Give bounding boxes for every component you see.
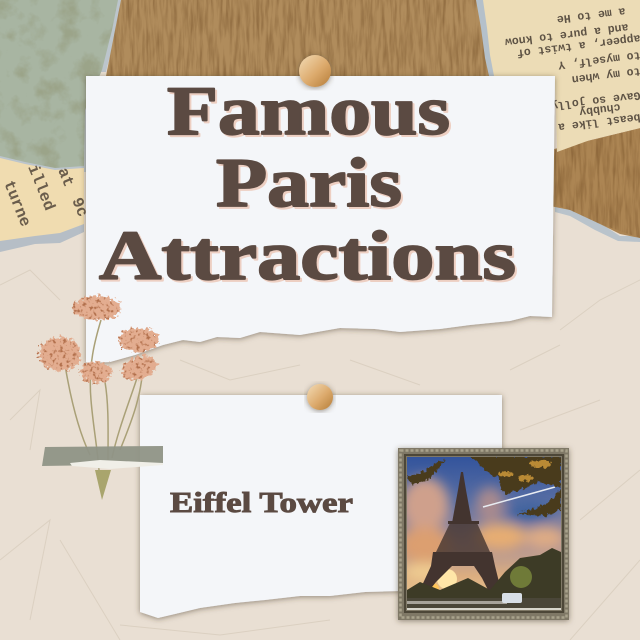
title shadow: Famous: [169, 75, 452, 152]
sun glow: [437, 569, 457, 589]
title text: Attractions: [99, 218, 516, 295]
title shadow: Paris: [218, 147, 404, 224]
newspaper scrap: top right: appeer, a twist of: [516, 31, 640, 59]
clouds: [399, 477, 565, 581]
title text: Famous: [167, 73, 450, 150]
newspaper scrap: top right: beast like a: [557, 110, 640, 133]
torn paper: brown kraft: [100, 0, 500, 80]
branches: [407, 456, 561, 516]
trees: [407, 548, 561, 600]
newspaper scrap: left: [0, 158, 91, 252]
frame: [398, 448, 569, 620]
newspaper scrap: top right: chubby: [578, 100, 621, 118]
newspaper scrap: left: turne: [0, 178, 34, 229]
washi tape: [42, 446, 163, 466]
white torn paper card: title: [86, 76, 555, 363]
newspaper scrap: top right: to my when: [571, 64, 640, 85]
contrail: [483, 487, 555, 507]
card heading: Eiffel Tower: Eiffel Tower: [170, 488, 353, 519]
newspaper scrap: left: 9c: [67, 195, 91, 220]
blossoms: [39, 296, 160, 384]
pin: title card: [299, 55, 331, 87]
title text: [99, 73, 516, 295]
ground: [407, 598, 561, 608]
pin: Eiffel Tower card: [307, 384, 333, 410]
stems: [65, 320, 143, 470]
dried flowers with tape: [39, 296, 163, 500]
torn paper: brown kraft right: [550, 125, 640, 242]
stem ends: [95, 470, 111, 500]
tower: [419, 472, 501, 592]
title shadow: [101, 75, 518, 297]
van: [502, 593, 522, 603]
torn paper: green: [0, 0, 122, 172]
newspaper scrap: top right: to myself, Y: [557, 48, 640, 71]
title: [99, 73, 518, 297]
title text: Paris: [216, 145, 402, 222]
newspaper scrap: top right: a me to He: [556, 4, 626, 25]
newspaper scrap: left: illed: [23, 162, 58, 213]
framed photo: Eiffel Tower: [398, 448, 569, 620]
white torn paper card: Eiffel Tower: [140, 395, 502, 618]
newspaper scrap: left: at: [53, 165, 77, 190]
sky: [407, 457, 561, 590]
newspaper scrap: top right: [476, 0, 640, 152]
newspaper scrap: top right: and a pure to know: [504, 20, 629, 48]
newspaper scrap: top right: Gave so jolly: [550, 88, 640, 112]
title shadow: Attractions: [101, 220, 518, 297]
